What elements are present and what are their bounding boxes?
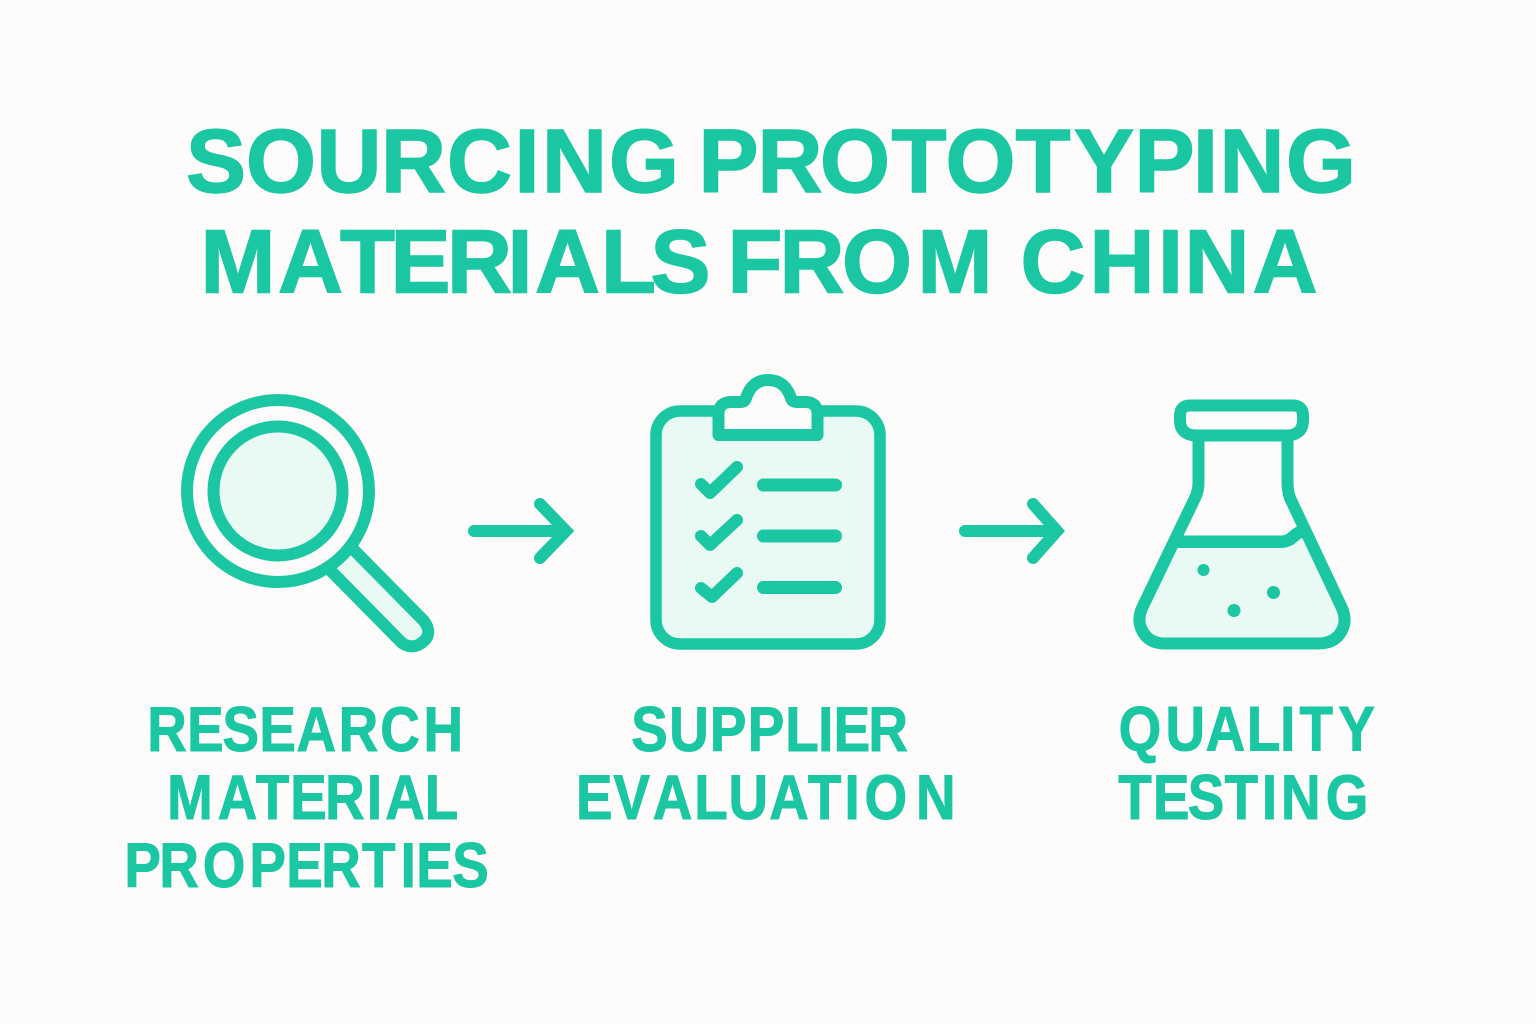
title: MATERIALS FROM CHINA — [201, 212, 1318, 312]
label: supplier evaluation — [576, 694, 956, 833]
label: quality testing — [1118, 694, 1375, 833]
arrow: research to supplier — [474, 504, 566, 558]
checklist row 2 — [701, 520, 836, 545]
icon: clipboard checklist — [656, 380, 880, 644]
label: research material properties: MATERIAL — [167, 762, 458, 833]
icon: flask — [1139, 406, 1345, 644]
flask bubbles — [1198, 564, 1280, 617]
label: supplier evaluation: EVALUATION — [576, 762, 956, 833]
title — [186, 112, 1356, 312]
label: research material properties: PROPERTIES — [124, 830, 489, 901]
label: research material properties — [124, 694, 489, 901]
checklist row 1 — [701, 467, 836, 493]
label: research material properties: RESEARCH — [147, 694, 463, 765]
icon: magnifying glass — [187, 400, 428, 646]
arrow: supplier to testing — [965, 504, 1057, 558]
label: quality testing: TESTING — [1118, 762, 1368, 833]
label: quality testing: QUALITY — [1119, 694, 1375, 764]
title: SOURCING PROTOTYPING — [186, 112, 1356, 212]
label: supplier evaluation: SUPPLIER — [631, 694, 908, 765]
checklist row 3 — [701, 573, 836, 597]
